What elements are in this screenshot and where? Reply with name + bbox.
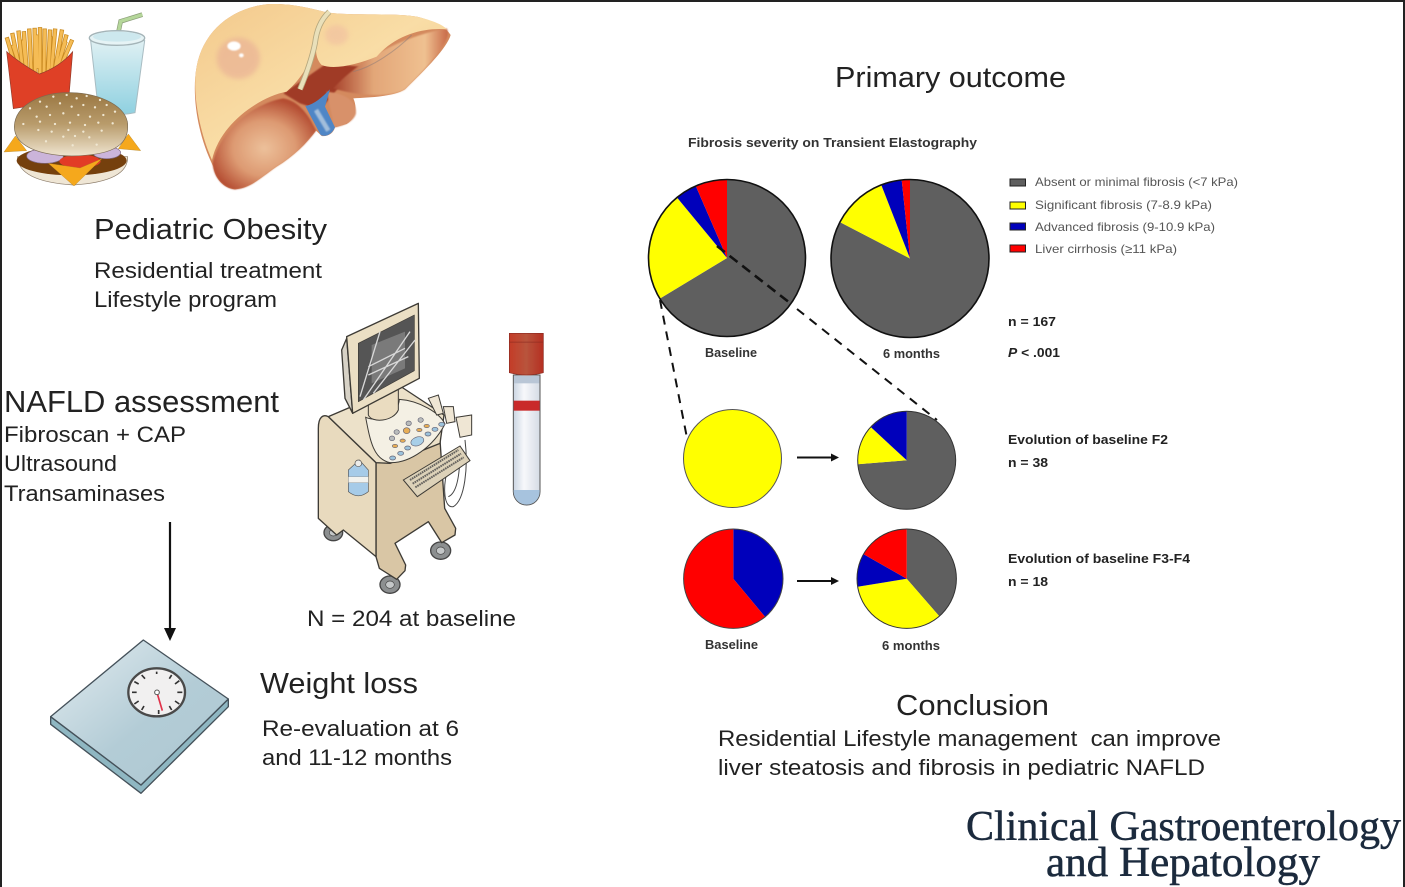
heading: Weight loss: Weight loss	[260, 668, 418, 700]
legend swatch and label: significant: Significant fibrosis (7-8.9 kPa)	[1035, 198, 1212, 212]
text: conclusion body: Residential Lifestyle management can improve	[718, 726, 1221, 751]
keyboard	[403, 446, 470, 497]
dashed zoom lines	[660, 246, 937, 438]
text: assessment methods: Fibroscan + CAP	[4, 422, 186, 447]
pie chart: F3-F4 baseline	[684, 529, 783, 628]
journal name: Clinical Gastroenterology	[966, 804, 1401, 850]
illustration: ultrasound machine	[318, 303, 472, 593]
right lobe underside	[333, 28, 448, 95]
pie chart: F3-F4 six months	[857, 529, 956, 628]
text: treatment type	[94, 258, 322, 312]
machine body	[318, 386, 456, 579]
heading: Conclusion: Conclusion	[896, 690, 1049, 722]
text: overall n and p value: P < .001	[1008, 345, 1060, 360]
cables	[445, 440, 466, 507]
control panel	[366, 399, 445, 463]
arrow: F2 evolution	[797, 454, 839, 462]
text: F3-F4 evolution	[1008, 551, 1191, 589]
liver posterior and shadow	[195, 4, 451, 189]
legend swatch and label: absent: Absent or minimal fibrosis (<7 kPa)	[1035, 175, 1238, 189]
gel bottle	[348, 460, 368, 496]
falciform ligament	[300, 12, 329, 89]
illustration: liver	[195, 4, 451, 189]
blue portal vein	[305, 89, 335, 136]
journal name	[966, 804, 1401, 886]
pie chart: F2 six months	[858, 411, 956, 509]
wheels	[324, 525, 451, 593]
legend swatch and label: advanced: Advanced fibrosis (9-10.9 kPa)	[1035, 220, 1215, 234]
text: treatment type: Residential treatment	[94, 258, 322, 283]
pie chart: F2 baseline	[684, 410, 782, 508]
text: F2 evolution: Evolution of baseline F2	[1008, 432, 1168, 447]
monitor	[342, 303, 419, 413]
illustration: weighing scale	[51, 640, 228, 793]
text: treatment type: Lifestyle program	[94, 287, 277, 312]
text: re-evaluation timing: and 11-12 months	[262, 745, 452, 770]
text: overall n and p value: n = 167	[1008, 314, 1056, 329]
pie chart: six months overall	[831, 180, 989, 338]
text: sample size: N = 204 at baseline	[307, 606, 516, 631]
icon: fast food	[4, 15, 145, 186]
dial	[128, 668, 185, 716]
text: F2 evolution	[1008, 432, 1168, 470]
bright highlight	[227, 41, 244, 57]
dark hilum	[283, 63, 360, 110]
label: 6 months: 6 months	[883, 346, 940, 361]
text: re-evaluation timing	[262, 716, 459, 770]
monitor scan image	[360, 332, 415, 400]
text: conclusion body	[718, 726, 1221, 780]
legend swatch and label: cirrhosis: Liver cirrhosis (≥11 kPa)	[1035, 242, 1177, 256]
text: assessment methods: Transaminases	[4, 481, 165, 506]
chart title: Fibrosis severity on Transient Elastography	[688, 135, 978, 150]
text: F3-F4 evolution: n = 18	[1008, 574, 1048, 589]
illustration: blood tube	[509, 333, 543, 505]
text: F3-F4 evolution: Evolution of baseline F3-F4	[1008, 551, 1191, 566]
neck	[368, 387, 398, 420]
label: 6 months lower: 6 months	[882, 638, 940, 653]
icon: french fries	[7, 29, 73, 109]
pie chart: baseline overall	[648, 179, 806, 336]
text: assessment methods	[4, 422, 186, 506]
heading: Pediatric Obesity: Pediatric Obesity	[94, 214, 328, 246]
arrow: F3-F4 evolution	[797, 577, 839, 585]
heading: Primary outcome: Primary outcome	[835, 62, 1066, 94]
legend	[1010, 175, 1238, 256]
icon: soda cup	[89, 15, 145, 115]
heading: NAFLD assessment: NAFLD assessment	[4, 384, 279, 419]
text: conclusion body: liver steatosis and fibrosis in pediatric NAFLD	[718, 755, 1205, 780]
label: baseline: Baseline	[705, 345, 757, 360]
label: baseline lower: Baseline	[705, 637, 758, 652]
pink patch	[217, 38, 260, 79]
text: F2 evolution: n = 38	[1008, 455, 1048, 470]
probes	[428, 395, 472, 437]
buttons	[389, 418, 445, 460]
arrow: down to weight loss	[164, 522, 176, 641]
icon: hamburger	[4, 93, 141, 186]
sesame seeds	[22, 94, 116, 146]
upper liver surface	[195, 4, 447, 160]
text: overall n and p value	[1008, 314, 1060, 360]
text: assessment methods: Ultrasound	[4, 451, 117, 476]
text: re-evaluation timing: Re-evaluation at 6	[262, 716, 459, 741]
caudate lobe	[327, 92, 356, 127]
journal name: and Hepatology	[1046, 840, 1320, 886]
left lobe underside	[213, 98, 316, 189]
